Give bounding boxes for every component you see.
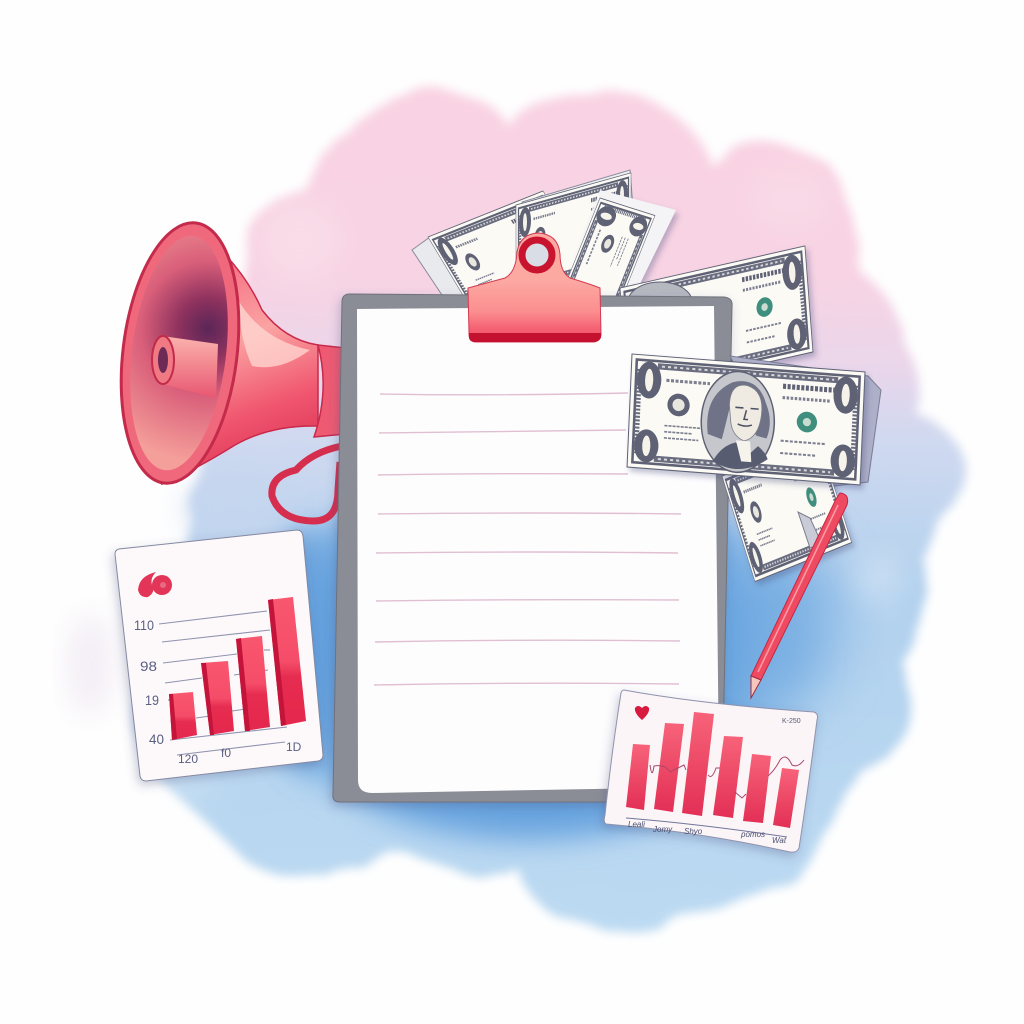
handwritten labels: Wat	[772, 836, 787, 845]
banknote: upper right	[620, 246, 813, 394]
card	[604, 690, 818, 852]
pen tip	[751, 676, 761, 698]
axis labels: 19	[145, 692, 159, 708]
banknote: fanned right print	[526, 198, 655, 400]
megaphone handle	[272, 446, 342, 521]
handwritten labels	[628, 820, 787, 845]
axis labels: f0	[221, 746, 231, 760]
clip ring	[522, 240, 552, 270]
clip base band	[469, 333, 601, 342]
banknote: stack behind main	[730, 356, 881, 490]
banknote: main with portrait	[627, 354, 865, 485]
clipboard	[333, 294, 732, 802]
pen body	[751, 493, 848, 680]
banknote: fanned middle	[516, 173, 631, 295]
grid lines	[159, 611, 287, 755]
axis labels: 40	[149, 731, 164, 747]
megaphone highlight	[238, 300, 310, 367]
megaphone collar	[314, 345, 346, 437]
handwritten labels: Shyo	[684, 827, 703, 836]
handwritten labels: Jomy	[652, 825, 673, 834]
banknote: fanned right	[560, 190, 676, 300]
left bar chart card	[115, 530, 323, 781]
binder clip	[468, 233, 601, 342]
ruled lines	[374, 393, 681, 685]
axis labels: 98	[140, 658, 157, 674]
axis labels: 120	[178, 752, 198, 766]
handwritten labels: pomos	[740, 830, 765, 839]
bars	[169, 597, 306, 740]
pen clip	[798, 512, 822, 548]
clipboard paper	[357, 306, 719, 793]
heart icon	[635, 706, 649, 720]
handwritten labels: Leali	[628, 820, 645, 829]
megaphone driver cap	[152, 336, 174, 384]
axis labels: 110	[134, 617, 154, 633]
clip body	[468, 233, 601, 342]
pen	[751, 493, 848, 698]
megaphone bell interior	[118, 230, 240, 476]
banknote: lower	[722, 437, 852, 582]
card	[115, 530, 323, 781]
banknote: fanned left	[428, 191, 592, 320]
axis labels: 1D	[286, 740, 302, 754]
megaphone bell rim	[107, 216, 253, 490]
banknote: back sheet middle	[522, 170, 634, 260]
axis labels	[134, 617, 302, 766]
right bar chart card	[604, 690, 818, 852]
clipboard board	[333, 294, 732, 802]
banknote: back sheet left	[412, 237, 480, 310]
header label: K-250	[782, 718, 801, 725]
trend line	[650, 757, 804, 798]
background wash: watercolor cloud	[68, 90, 964, 933]
money behind the clipboard	[412, 170, 813, 400]
megaphone driver	[162, 336, 218, 398]
quote icon	[138, 572, 172, 597]
pen highlight	[758, 505, 838, 672]
megaphone	[107, 216, 346, 521]
portrait	[699, 369, 776, 475]
megaphone horn	[162, 224, 318, 484]
baseline	[626, 818, 787, 837]
bars	[626, 712, 799, 828]
